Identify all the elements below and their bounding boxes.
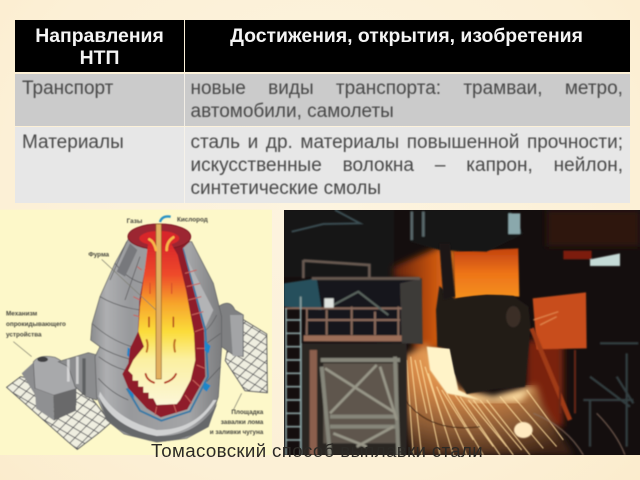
- gearbox: tilting mechanism: [22, 353, 102, 421]
- vessel: mouth rim: [128, 224, 191, 249]
- sparks cascade: [403, 343, 573, 455]
- arrow: oxygen inlet: [160, 216, 171, 222]
- text: materials description: –: [435, 155, 445, 176]
- upper structure and window: [292, 210, 620, 266]
- text: materials description: сталь: [190, 132, 240, 153]
- text: materials description: и: [248, 132, 258, 153]
- text: materials description: капрон,: [466, 155, 533, 176]
- label: charging deck: завалки лома: [221, 419, 264, 426]
- photo background: [284, 210, 640, 455]
- vessel: steel shell: [91, 237, 222, 442]
- text: transport description: метро,: [565, 78, 623, 99]
- label: tilting mechanism: Механизм: [6, 310, 37, 317]
- label: gases: Газы: [127, 218, 142, 225]
- furnace glow behind ladle: [393, 247, 563, 427]
- photo: steel pouring from ladle: [284, 210, 640, 455]
- platform scaffold: [284, 260, 423, 455]
- table: directions and achievements: [15, 20, 630, 203]
- vessel: shell bands: [93, 242, 221, 400]
- header cell: achievements: [185, 20, 630, 72]
- arrows: gas and heat flow: [146, 237, 176, 383]
- text: transport label: Транспорт: [22, 78, 113, 99]
- text: materials description: прочности;: [527, 132, 623, 153]
- vessel: cooling jacket blue edge: [127, 248, 208, 421]
- text: materials description: материалы: [300, 132, 399, 153]
- text: transport description: [190, 78, 623, 122]
- scaffold tower: [300, 343, 407, 455]
- orange panel on the right: [533, 292, 587, 349]
- ladle: [436, 286, 531, 394]
- platform: left tilting mechanism deck: [7, 377, 111, 449]
- header cell: directions: Направления: [35, 25, 164, 47]
- vessel: molten cavity: [128, 242, 195, 405]
- text: transport description: виды: [268, 78, 314, 99]
- leader lines: [13, 259, 242, 410]
- text: transport description: трамваи,: [463, 78, 543, 99]
- platform: right scrap charging deck: [225, 319, 267, 393]
- label: oxygen: Кислород: [177, 217, 208, 224]
- diagram labels: [6, 217, 264, 436]
- text: transport description: автомобили, самолеты: [190, 101, 394, 122]
- vessel: refractory lining: [122, 230, 205, 417]
- ladle hook: [439, 243, 455, 300]
- label: tilting mechanism: устройства: [6, 331, 42, 339]
- trunnion: right bearing: [218, 303, 243, 357]
- label: tilting mechanism: опрокидывающего: [6, 321, 66, 328]
- text: materials description: др.: [266, 132, 293, 153]
- diagram: converter cross-section: [0, 210, 272, 455]
- label: charging deck: Площадка: [231, 409, 264, 416]
- text: transport description: новые: [190, 78, 246, 99]
- text: materials description: нейлон,: [554, 155, 623, 176]
- text: materials description: [190, 132, 623, 199]
- caption: Томасовский способ выплавки стали: [151, 440, 483, 461]
- table row: transport: [15, 74, 630, 126]
- right lower structure: [532, 312, 638, 455]
- lance: oxygen tube: [156, 224, 161, 379]
- header cell: directions: [15, 20, 184, 72]
- header cell: directions: НТП: [80, 47, 119, 69]
- text: materials description: искусственные: [190, 155, 322, 176]
- table row: materials: [15, 127, 630, 203]
- vessel: bottom dish shading: [99, 397, 217, 442]
- text: materials description: синтетические смолы: [190, 178, 381, 199]
- furnace opening: [454, 248, 519, 298]
- molten stream: [427, 347, 480, 400]
- header cell: achievements: Достижения, открытия, изобретения: [230, 25, 583, 47]
- text: materials label: Материалы: [22, 132, 124, 153]
- sparks streaks: [405, 357, 563, 455]
- label: charging deck: и заливки чугуна: [210, 429, 264, 436]
- panel: yellow diagram background: [0, 210, 272, 455]
- label: lance: Фурма: [88, 252, 110, 259]
- text: transport description: транспорта:: [336, 78, 441, 99]
- text: materials description: повышенной: [407, 132, 519, 153]
- table header row: [15, 20, 630, 72]
- text: materials description: волокна: [343, 155, 414, 176]
